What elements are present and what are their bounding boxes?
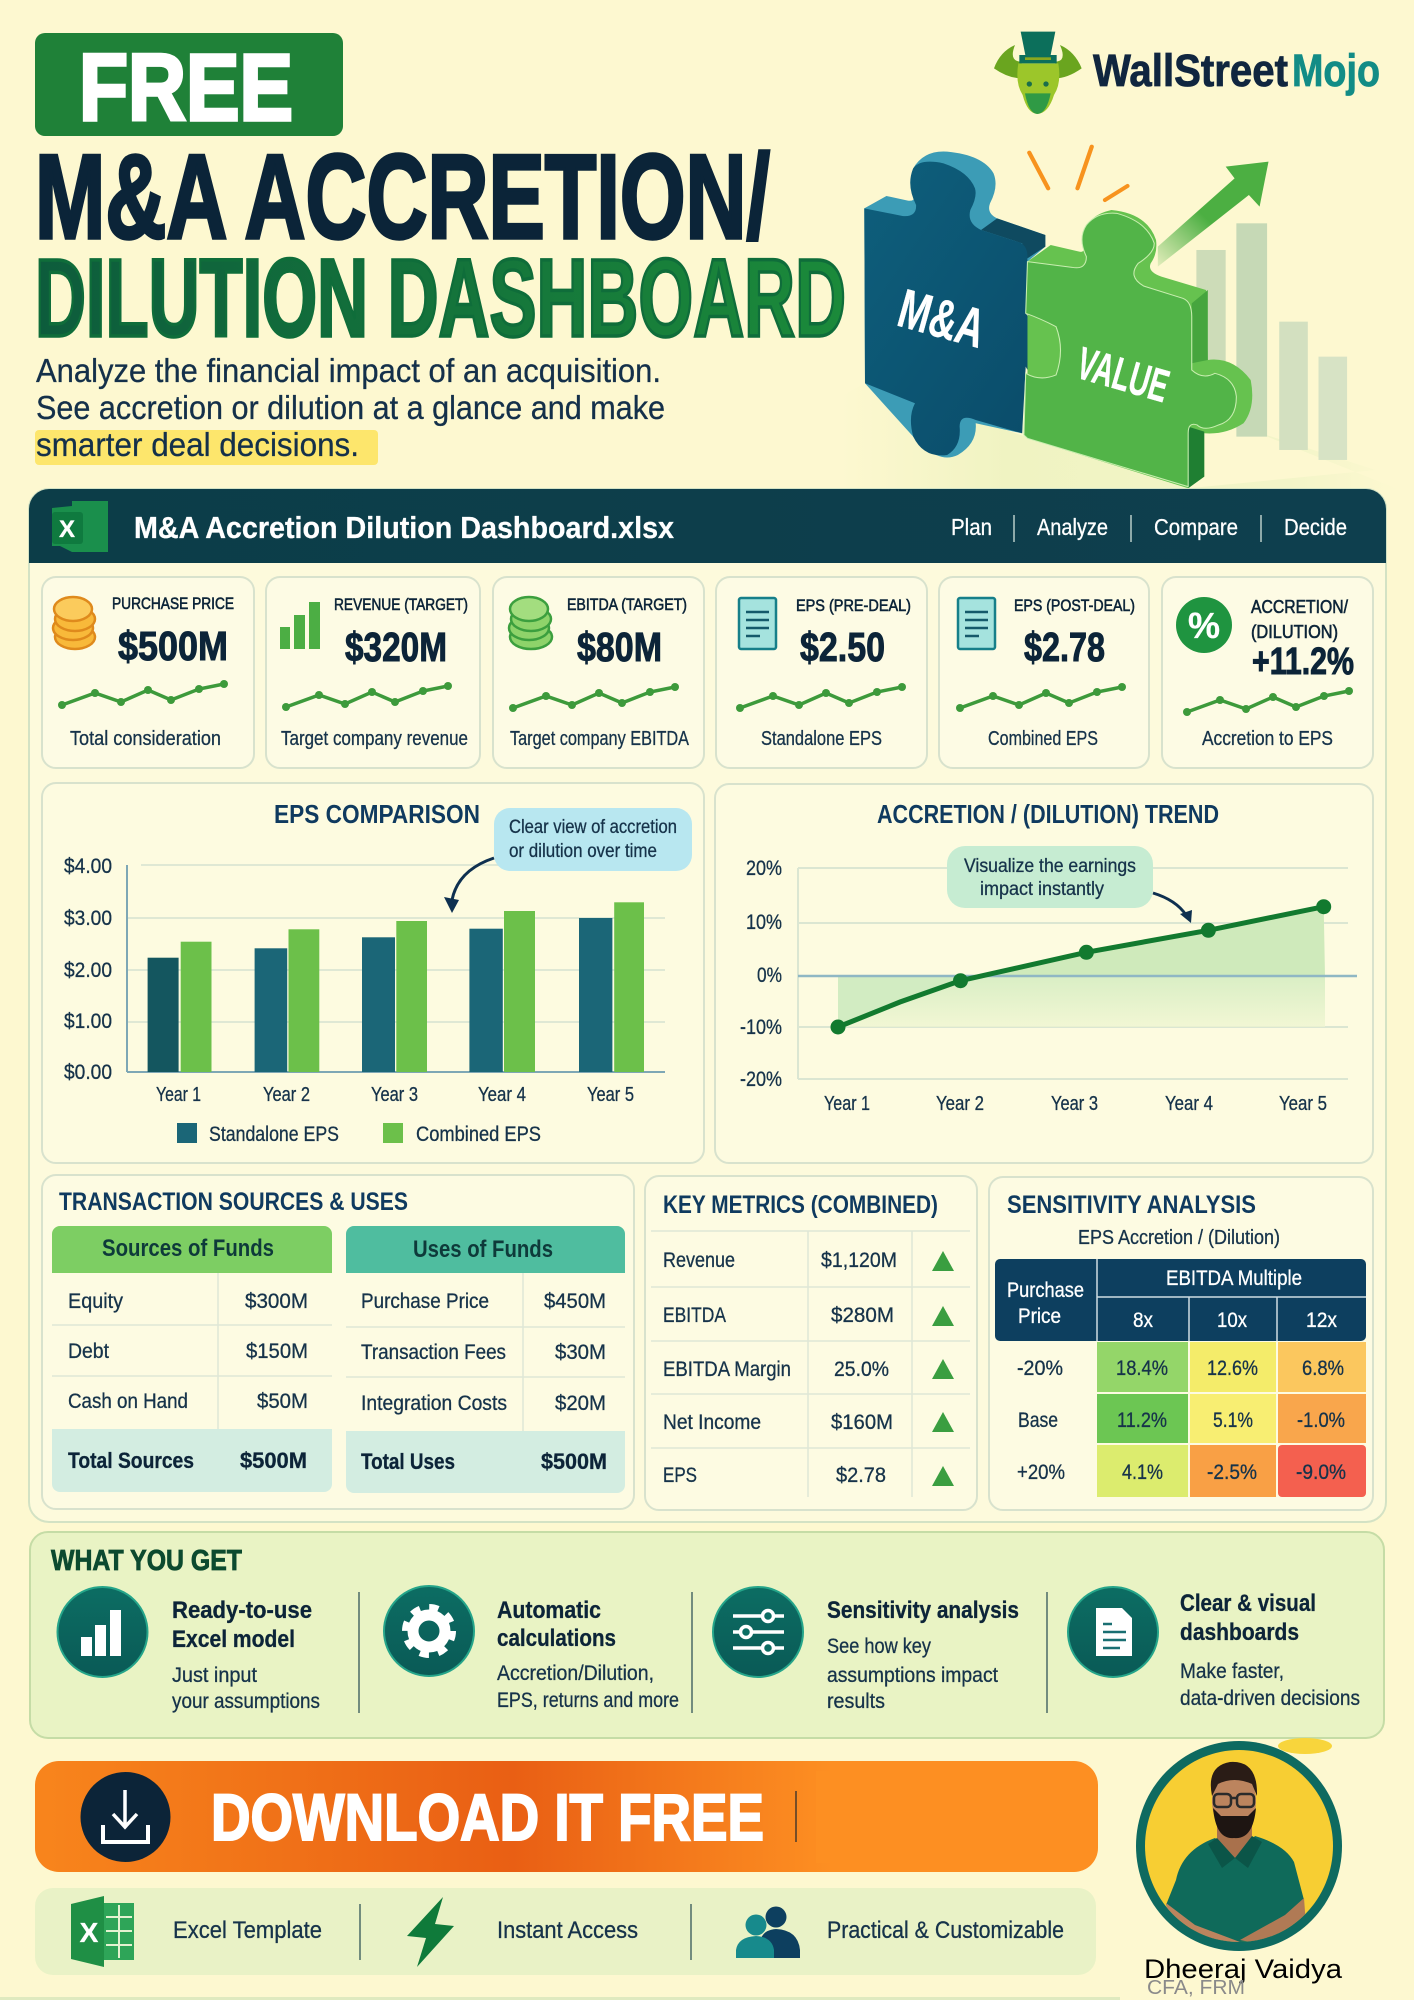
item: sensitivity analysis: assumptions impact	[827, 1664, 998, 1687]
heading: TRANSACTION SOURCES & USES	[59, 1188, 408, 1216]
heat map cells: 6.8%	[1302, 1357, 1344, 1380]
x-axis labels	[156, 1084, 634, 1106]
item: excel model	[58, 1587, 320, 1713]
table: sources of funds: $500M	[240, 1448, 307, 1473]
heat map cells: 12.6%	[1207, 1357, 1258, 1380]
item: automatic calculations	[384, 1586, 679, 1712]
KPI card: accretion: (DILUTION)	[1251, 622, 1338, 642]
x-axis labels: Year 1	[156, 1084, 201, 1106]
header navigation	[951, 514, 1347, 542]
item: visual dashboards: data-driven decisions	[1180, 1687, 1360, 1710]
x-axis labels: Year 5	[587, 1084, 634, 1106]
heat map cells: -9.0%	[1296, 1461, 1346, 1484]
icon: excel file: X	[59, 516, 75, 543]
y-axis labels: 20%	[746, 857, 782, 880]
callout: visualize: Visualize the earnings	[964, 855, 1136, 877]
hero illustration: puzzle pieces: M&A	[892, 277, 992, 360]
KPI card: EPS pre-deal	[716, 577, 927, 768]
header navigation: Decide	[1284, 514, 1347, 540]
line series	[830, 899, 1331, 1034]
icons: up triangles	[932, 1251, 954, 1486]
legend: Combined EPS	[416, 1123, 541, 1146]
x-axis labels: Year 2	[936, 1093, 984, 1115]
y-axis labels: $2.00	[64, 959, 112, 982]
table header: 10x	[1217, 1309, 1247, 1332]
table: uses of funds: Uses of Funds	[413, 1236, 553, 1263]
panel: transaction sources and uses	[42, 1175, 634, 1509]
metric rows: $160M	[831, 1411, 893, 1434]
item: sensitivity analysis: results	[827, 1690, 885, 1713]
table header: EBITDA Multiple	[1166, 1267, 1302, 1290]
item: visual dashboards	[1068, 1587, 1360, 1710]
KPI card: revenue	[266, 577, 480, 768]
panel: key metrics	[645, 1176, 977, 1510]
KPI card: accretion: Accretion to EPS	[1202, 728, 1333, 750]
table: uses of funds: Integration Costs	[361, 1392, 507, 1415]
header navigation: Compare	[1154, 514, 1238, 540]
table: uses of funds: Total Uses	[361, 1449, 455, 1474]
metric rows	[663, 1249, 897, 1487]
icon: people	[736, 1906, 800, 1958]
y-axis labels	[740, 857, 782, 1091]
KPI card: revenue: REVENUE (TARGET)	[334, 595, 468, 614]
KPI card: revenue: $320M	[345, 624, 447, 670]
logo: WallStreetMojo	[994, 32, 1380, 114]
icon: document	[739, 598, 776, 649]
panel: EPS comparison chart	[42, 783, 704, 1163]
button: download it free	[35, 1761, 1098, 1872]
subtitle text: See accretion or dilution at a glance and make	[36, 389, 665, 426]
metric rows: Revenue	[663, 1249, 735, 1272]
y-axis labels: $3.00	[64, 907, 112, 930]
panel: features bar: Instant Access	[497, 1917, 638, 1944]
table: sources of funds: Sources of Funds	[102, 1235, 274, 1262]
row labels: +20%	[1017, 1461, 1065, 1484]
KPI card: EBITDA	[493, 577, 704, 768]
x-axis labels: Year 4	[478, 1084, 526, 1106]
x-axis labels: Year 3	[1051, 1093, 1098, 1115]
icon: green coins	[509, 597, 552, 649]
panel: sensitivity analysis	[989, 1177, 1373, 1510]
metric rows: EBITDA	[663, 1304, 726, 1327]
hero illustration: puzzle pieces: VALUE	[1071, 337, 1175, 412]
y-axis labels: $4.00	[64, 855, 112, 878]
icon: excel: X	[80, 1917, 99, 1948]
y-axis labels: -20%	[740, 1068, 782, 1091]
heat map cells: -2.5%	[1207, 1461, 1257, 1484]
row labels: Base	[1018, 1409, 1058, 1432]
portrait: Dheeraj Vaidya	[1136, 1738, 1343, 1999]
callout: clear view	[494, 808, 692, 871]
area fill	[838, 907, 1325, 1027]
table: uses of funds: $30M	[555, 1341, 606, 1364]
item: sensitivity analysis: See how key	[827, 1635, 931, 1658]
icon: sliders	[713, 1587, 803, 1677]
icon: lightning	[407, 1897, 454, 1967]
heat map cells: -1.0%	[1297, 1409, 1345, 1432]
subtitle text: Analyze the financial impact of an acquisition.	[36, 352, 661, 389]
KPI card: EBITDA: Target company EBITDA	[510, 728, 690, 750]
metric rows: $2.78	[836, 1464, 886, 1487]
item: automatic calculations: calculations	[497, 1625, 616, 1652]
y-axis labels: 10%	[746, 911, 782, 934]
table: uses of funds: $450M	[544, 1290, 606, 1313]
KPI card: accretion: +11.2%	[1252, 641, 1354, 683]
icon: download	[80, 1772, 170, 1862]
title: M&A ACCRETION/	[35, 130, 770, 264]
metric rows: 25.0%	[834, 1358, 889, 1381]
callout: clear view: Clear view of accretion	[509, 816, 677, 838]
callout: visualize: impact instantly	[980, 878, 1104, 900]
header title: M&A Accretion Dilution Dashboard.xlsx	[134, 510, 675, 545]
KPI card: purchase price: Total consideration	[70, 728, 221, 750]
table header: 12x	[1306, 1309, 1337, 1332]
metric rows: EBITDA Margin	[663, 1358, 791, 1381]
item: sensitivity analysis: Sensitivity analysis	[827, 1597, 1019, 1624]
KPI card: purchase price: $500M	[118, 623, 228, 669]
table: sources of funds: Debt	[68, 1340, 109, 1363]
panel: accretion dilution trend chart	[715, 784, 1373, 1163]
table: sources of funds: $150M	[246, 1340, 308, 1363]
logo: WallStreetMojo: WallStreet	[1093, 45, 1288, 96]
KPI card: revenue: Target company revenue	[281, 728, 468, 750]
badge: FREE: FREE	[79, 35, 293, 141]
KPI card: accretion: ACCRETION/	[1251, 597, 1348, 617]
arrow: callout to line	[1153, 893, 1192, 923]
table: uses of funds	[346, 1226, 625, 1493]
row labels	[1017, 1357, 1065, 1484]
table header: 8x	[1133, 1309, 1153, 1332]
table header	[995, 1259, 1366, 1341]
table: sources of funds: $300M	[245, 1290, 308, 1313]
KPI card: EPS post-deal	[939, 577, 1149, 768]
icon: gold coins	[53, 597, 95, 649]
subtitle text	[35, 352, 665, 465]
panel: sensitivity analysis: EPS Accretion / (Dilution)	[1078, 1227, 1280, 1249]
item: excel model: Just input	[172, 1664, 257, 1687]
panel: features bar: Practical & Customizable	[827, 1917, 1064, 1944]
table: sources of funds: $50M	[257, 1390, 308, 1413]
KPI card: EBITDA: EBITDA (TARGET)	[567, 595, 687, 614]
portrait: Dheeraj Vaidya: Dheeraj Vaidya	[1144, 1954, 1343, 1984]
heat map cells: 18.4%	[1116, 1357, 1168, 1380]
metric rows: $1,120M	[821, 1249, 897, 1272]
legend: Standalone EPS	[209, 1123, 339, 1146]
item: automatic calculations: Automatic	[497, 1597, 601, 1624]
icon: excel file	[52, 501, 108, 552]
icon: gear	[384, 1586, 474, 1676]
x-axis labels: Year 3	[371, 1084, 418, 1106]
table: uses of funds: Purchase Price	[361, 1290, 489, 1313]
table header: Price	[1018, 1305, 1061, 1328]
bars: standalone EPS	[148, 918, 612, 1072]
heading: WHAT YOU GET	[51, 1545, 242, 1577]
KPI card: EBITDA: $80M	[577, 624, 662, 670]
header navigation: Plan	[951, 514, 992, 540]
heat map cells	[1097, 1342, 1366, 1497]
title	[35, 130, 846, 360]
panel: features bar: Excel Template	[173, 1917, 322, 1944]
x-axis labels: Year 5	[1279, 1093, 1327, 1115]
KPI card: EPS post-deal: Combined EPS	[988, 728, 1098, 750]
icon: excel	[71, 1896, 134, 1967]
heat map cells: 4.1%	[1122, 1461, 1163, 1484]
table: uses of funds: Transaction Fees	[361, 1341, 506, 1364]
x-axis labels: Year 2	[263, 1084, 310, 1106]
subtitle text: smarter deal decisions.	[36, 426, 359, 463]
KPI card: purchase price	[42, 577, 254, 768]
KPI card: EPS post-deal: EPS (POST-DEAL)	[1014, 596, 1135, 615]
KPI card: EPS pre-deal: Standalone EPS	[761, 728, 882, 750]
header navigation: Analyze	[1037, 514, 1108, 540]
KPI card: EPS pre-deal: $2.50	[800, 624, 885, 670]
x-axis labels: Year 1	[824, 1093, 870, 1115]
table header: Purchase	[1007, 1279, 1084, 1302]
y-axis labels: $0.00	[64, 1061, 112, 1084]
title: DILUTION DASHBOARD	[35, 237, 846, 360]
icon: percent circle: %	[1188, 605, 1220, 646]
heading: SENSITIVITY ANALYSIS	[1007, 1191, 1256, 1219]
panel: features bar	[35, 1888, 1096, 1975]
item: excel model: Ready-to-use	[172, 1597, 312, 1624]
row labels: -20%	[1017, 1357, 1063, 1380]
metric rows: EPS	[663, 1464, 697, 1487]
KPI card: accretion	[1162, 577, 1373, 768]
icon: document	[958, 598, 995, 649]
arrow: callout to bars	[444, 858, 494, 913]
callout: clear view: or dilution over time	[509, 840, 657, 862]
table: sources of funds	[52, 1226, 332, 1492]
item: automatic calculations: EPS, returns and more	[497, 1689, 679, 1712]
item: visual dashboards: Clear & visual	[1180, 1590, 1316, 1617]
x-axis labels	[824, 1093, 1327, 1115]
button: download it free: DOWNLOAD IT FREE	[211, 1780, 764, 1854]
heading: EPS COMPARISON	[274, 799, 480, 829]
x-axis labels: Year 4	[1165, 1093, 1213, 1115]
panel: dashboard	[29, 489, 1386, 1522]
table: uses of funds: $500M	[541, 1449, 607, 1474]
table: sources of funds: Total Sources	[68, 1448, 194, 1473]
icon: bars	[58, 1587, 148, 1677]
panel: what you get	[30, 1532, 1384, 1738]
logo: WallStreetMojo: Mojo	[1292, 45, 1380, 96]
bars: combined EPS	[181, 902, 644, 1072]
hero illustration: puzzle pieces	[840, 147, 1400, 490]
legend	[177, 1123, 541, 1146]
icon: bars	[280, 602, 320, 649]
item: visual dashboards: dashboards	[1180, 1619, 1299, 1646]
item: automatic calculations: Accretion/Dilution,	[497, 1662, 654, 1685]
metric rows: $280M	[831, 1304, 894, 1327]
heat map cells: 5.1%	[1213, 1409, 1253, 1432]
item: visual dashboards: Make faster,	[1180, 1660, 1284, 1683]
y-axis labels	[64, 855, 112, 1084]
heading: ACCRETION / (DILUTION) TREND	[877, 799, 1219, 829]
table: sources of funds: Equity	[68, 1290, 123, 1313]
portrait: Dheeraj Vaidya: CFA, FRM	[1147, 1977, 1245, 1999]
item: excel model: Excel model	[172, 1626, 295, 1653]
KPI card: EPS pre-deal: EPS (PRE-DEAL)	[796, 596, 911, 615]
heading: KEY METRICS (COMBINED)	[663, 1191, 938, 1219]
metric rows: Net Income	[663, 1411, 761, 1434]
icon: bull	[994, 32, 1082, 114]
item: excel model: your assumptions	[172, 1690, 320, 1713]
heat map cells: 11.2%	[1117, 1409, 1167, 1432]
table: uses of funds: $20M	[555, 1392, 606, 1415]
icon: document	[1068, 1587, 1158, 1677]
icon: percent circle	[1176, 597, 1232, 653]
callout: visualize	[947, 846, 1153, 908]
y-axis labels: $1.00	[64, 1010, 112, 1033]
item: sensitivity analysis	[713, 1587, 1019, 1713]
KPI card: EPS post-deal: $2.78	[1024, 624, 1105, 670]
table: sources of funds: Cash on Hand	[68, 1390, 188, 1413]
KPI card: purchase price: PURCHASE PRICE	[112, 594, 234, 613]
y-axis labels: 0%	[757, 964, 782, 987]
y-axis labels: -10%	[740, 1016, 782, 1039]
